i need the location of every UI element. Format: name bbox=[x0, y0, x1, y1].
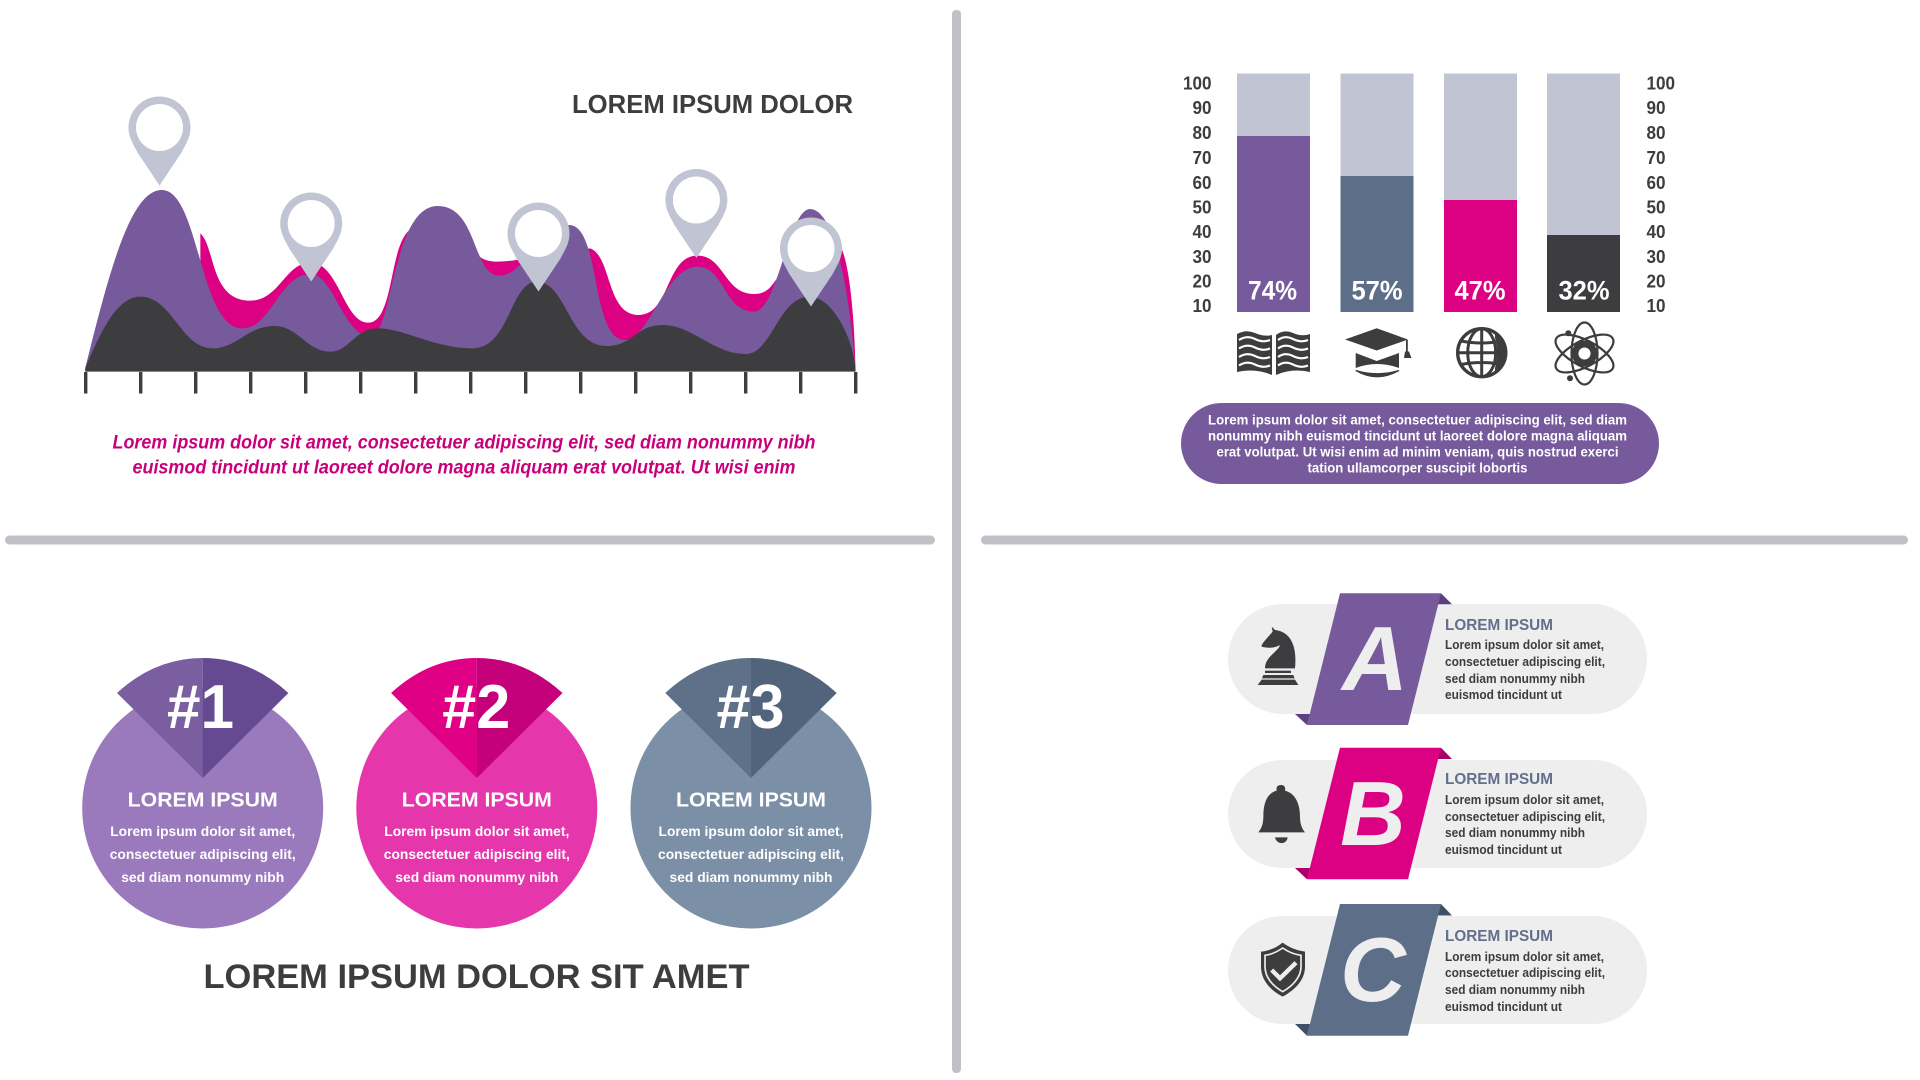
caption text bbox=[112, 432, 816, 478]
description pill: nonummy nibh euismod tincidunt ut laoreet dolore magna aliquam bbox=[1208, 428, 1627, 444]
icon: map pin 3 bbox=[508, 202, 570, 292]
left axis labels: 70 bbox=[1192, 147, 1212, 168]
card 2: sed diam nonummy nibh bbox=[395, 869, 558, 885]
row C text bbox=[1445, 950, 1605, 1014]
row B text: sed diam nonummy nibh bbox=[1445, 826, 1585, 840]
card 2: LOREM IPSUM bbox=[402, 790, 552, 812]
bar 32%: 32% bbox=[1558, 276, 1610, 306]
icon: atom bbox=[1550, 322, 1619, 384]
bar 57%: 57% bbox=[1352, 276, 1402, 306]
card 2: consectetuer adipiscing elit, bbox=[384, 846, 570, 862]
row A text: Lorem ipsum dolor sit amet, bbox=[1445, 638, 1604, 652]
card 3: #3 bbox=[716, 673, 784, 742]
card 2 bbox=[356, 658, 597, 928]
row C text: Lorem ipsum dolor sit amet, bbox=[1445, 950, 1604, 964]
row B text bbox=[1445, 793, 1605, 857]
icon: open book bbox=[1237, 331, 1310, 375]
left axis labels: 40 bbox=[1192, 221, 1212, 242]
icon: map pin 4 bbox=[665, 169, 727, 258]
card 1: #1 bbox=[167, 673, 234, 742]
card 1: sed diam nonummy nibh bbox=[121, 869, 284, 885]
row A text bbox=[1445, 638, 1605, 702]
card 1: LOREM IPSUM bbox=[128, 790, 278, 812]
icon: globe bbox=[1458, 328, 1507, 377]
left axis labels: 90 bbox=[1192, 97, 1212, 118]
description pill: erat volutpat. Ut wisi enim ad minim veniam, quis nostrud exerci bbox=[1216, 444, 1618, 460]
row B text: euismod tincidunt ut bbox=[1445, 843, 1563, 857]
right axis labels: 70 bbox=[1646, 147, 1666, 168]
icon: map pin 2 bbox=[280, 192, 342, 282]
icon: graduation cap bbox=[1345, 328, 1412, 377]
card 3 bbox=[630, 658, 872, 928]
right axis labels: 10 bbox=[1646, 295, 1666, 316]
row A text: euismod tincidunt ut bbox=[1445, 688, 1563, 702]
row C text: euismod tincidunt ut bbox=[1445, 1000, 1563, 1014]
panel: option list bbox=[1228, 593, 1647, 1036]
left axis labels: 10 bbox=[1192, 295, 1212, 316]
row C bbox=[1228, 904, 1647, 1036]
heading: lorem ipsum dolor sit amet: LOREM IPSUM DOLOR SIT AMET bbox=[204, 958, 750, 996]
panel: ranked circles bbox=[82, 658, 871, 996]
icon: shield check bbox=[1261, 943, 1305, 997]
bar 57% bbox=[1340, 74, 1414, 312]
card 3: LOREM IPSUM bbox=[676, 790, 826, 812]
right axis labels: 60 bbox=[1646, 172, 1666, 193]
right axis labels: 40 bbox=[1646, 221, 1666, 242]
panel: area chart bbox=[84, 89, 857, 478]
bar 47% bbox=[1444, 74, 1517, 312]
icon: chess knight bbox=[1258, 627, 1298, 685]
panel: bar chart bbox=[1181, 72, 1675, 484]
right axis labels: 90 bbox=[1646, 97, 1666, 118]
row B label: LOREM IPSUM bbox=[1445, 771, 1553, 788]
row A label: LOREM IPSUM bbox=[1445, 617, 1553, 634]
row A text: consectetuer adipiscing elit, bbox=[1445, 655, 1605, 669]
card 3: consectetuer adipiscing elit, bbox=[658, 846, 844, 862]
left axis labels bbox=[1183, 72, 1212, 316]
icon: map pin 1 bbox=[128, 96, 190, 186]
right axis labels: 30 bbox=[1646, 246, 1666, 267]
area chart bbox=[85, 190, 856, 372]
row B text: consectetuer adipiscing elit, bbox=[1445, 810, 1605, 824]
card 3: sed diam nonummy nibh bbox=[670, 869, 832, 885]
row C label: LOREM IPSUM bbox=[1445, 928, 1553, 945]
caption text: euismod tincidunt ut laoreet dolore magna aliquam erat volutpat. Ut wisi enim bbox=[132, 458, 796, 478]
right axis labels: 50 bbox=[1646, 196, 1666, 218]
row C: C bbox=[1340, 920, 1407, 1021]
row A bbox=[1228, 593, 1647, 725]
description pill bbox=[1181, 403, 1659, 484]
description pill: tation ullamcorper suscipit lobortis bbox=[1308, 460, 1528, 476]
icon: map pin 5 bbox=[780, 218, 842, 306]
icon: bell bbox=[1258, 785, 1305, 843]
right axis labels: 80 bbox=[1646, 122, 1666, 143]
card 1: Lorem ipsum dolor sit amet, bbox=[110, 823, 295, 839]
left axis labels: 30 bbox=[1192, 246, 1212, 267]
card 3: Lorem ipsum dolor sit amet, bbox=[658, 823, 844, 839]
card 1: consectetuer adipiscing elit, bbox=[110, 846, 296, 862]
right axis labels bbox=[1646, 72, 1675, 316]
row A text: sed diam nonummy nibh bbox=[1445, 672, 1585, 686]
bar 47%: 47% bbox=[1454, 276, 1506, 306]
description pill: Lorem ipsum dolor sit amet, consectetuer adipiscing elit, sed diam bbox=[1208, 412, 1627, 428]
row A: A bbox=[1340, 609, 1408, 710]
left axis labels: 20 bbox=[1192, 270, 1212, 292]
axis ticks bbox=[84, 372, 857, 394]
row C text: consectetuer adipiscing elit, bbox=[1445, 966, 1605, 980]
left axis labels: 60 bbox=[1192, 172, 1212, 193]
heading: lorem ipsum dolor: LOREM IPSUM DOLOR bbox=[572, 89, 853, 119]
right axis labels: 100 bbox=[1646, 72, 1675, 94]
right axis labels: 20 bbox=[1646, 270, 1666, 292]
left axis labels: 50 bbox=[1192, 196, 1212, 218]
row B: B bbox=[1340, 764, 1406, 865]
left axis labels: 80 bbox=[1192, 122, 1212, 143]
caption text: Lorem ipsum dolor sit amet, consectetuer adipiscing elit, sed diam nonummy nibh bbox=[112, 432, 816, 454]
card 1 bbox=[82, 658, 323, 928]
row C text: sed diam nonummy nibh bbox=[1445, 983, 1585, 997]
row B text: Lorem ipsum dolor sit amet, bbox=[1445, 793, 1604, 807]
card 2: Lorem ipsum dolor sit amet, bbox=[384, 823, 569, 839]
row B bbox=[1228, 748, 1647, 879]
bar 74%: 74% bbox=[1248, 276, 1297, 306]
left axis labels: 100 bbox=[1183, 72, 1212, 94]
card 2: #2 bbox=[442, 673, 510, 742]
bar 74% bbox=[1237, 74, 1310, 312]
bar 32% bbox=[1547, 74, 1620, 312]
